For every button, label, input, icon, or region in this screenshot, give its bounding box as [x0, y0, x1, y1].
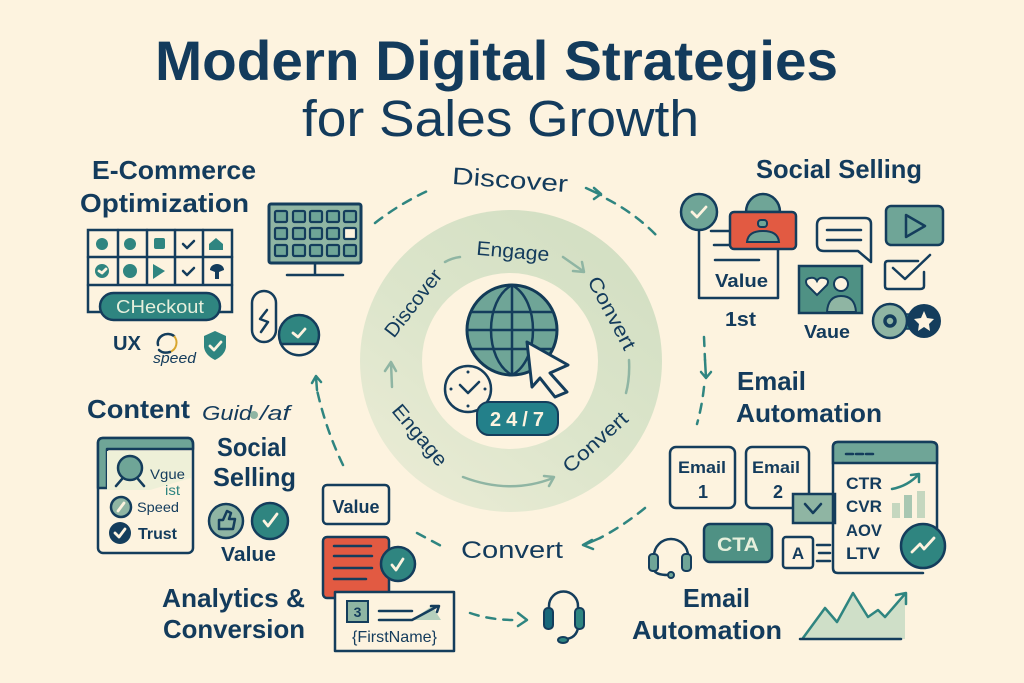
heading upper: [736, 366, 882, 428]
icon: monitor: [269, 204, 361, 275]
text format icon: A: [792, 544, 804, 563]
heading lower: Automation: [632, 615, 782, 645]
button: checkout: CHeckout: [116, 297, 204, 317]
value document: [699, 225, 778, 298]
script label: /af: [257, 403, 293, 425]
personalised email card: [335, 592, 454, 651]
outer cycle: Discover: Discover: [451, 163, 569, 198]
text format icon: [783, 537, 830, 568]
icon: headset small: [649, 539, 691, 578]
badge: 24/7: 24/7: [490, 409, 544, 431]
personalised email card: 3: [354, 604, 362, 620]
ring label: Convert lower: Convert: [559, 407, 633, 478]
heading upper: Email: [737, 366, 806, 396]
label: UX: UX: [113, 333, 142, 355]
ring label: Engage: Engage: [476, 238, 550, 266]
content card: ist: [165, 482, 180, 498]
icon: trend badge: [901, 524, 945, 568]
icon: clock: [445, 366, 491, 412]
heading: social selling: Selling: [213, 462, 296, 492]
ring label: Engage lower: Engage: [387, 400, 451, 471]
icon: check gauge: [279, 315, 319, 355]
profile card: [730, 194, 796, 249]
ring arrows: [385, 257, 629, 486]
icon: thumbs up: [209, 504, 243, 538]
metrics window: LTV: [846, 544, 881, 563]
heading: Social Selling: [756, 154, 922, 184]
metrics window: CTR: [846, 474, 882, 493]
heading: E-Commerce: [92, 155, 256, 185]
badge: 24/7: [477, 402, 558, 435]
feature grid: [88, 230, 232, 312]
script label: [202, 403, 293, 425]
icon: check circle: [381, 547, 415, 581]
ring label: Convert upper: Convert: [583, 273, 640, 354]
heading: social selling: [213, 432, 296, 492]
icon: cursor: [527, 342, 568, 397]
icon: globe: [467, 285, 557, 375]
metrics window: CVR: [846, 497, 882, 516]
button: CTA: [704, 524, 772, 562]
value box: Value: [332, 497, 380, 517]
heading: [80, 155, 256, 218]
label: 1st: 1st: [725, 309, 756, 331]
metrics window: [833, 442, 937, 573]
panel: e-commerce optimization: [80, 155, 361, 367]
heading: Analytics &: [162, 583, 305, 613]
label: value: Value: [221, 544, 276, 566]
icon: speed swirl: speed: [153, 350, 197, 367]
heading: Optimization: [80, 188, 249, 218]
button: CTA: CTA: [717, 535, 759, 556]
icon: checkbox: [885, 255, 930, 289]
panel: email automation: [632, 366, 945, 645]
email 1 box: Email: [678, 458, 726, 477]
script label: Guid: [202, 403, 253, 425]
ring label: Discover: Discover: [380, 265, 447, 342]
email 2 box: Email: [752, 458, 800, 477]
content card: Vgue: [150, 466, 185, 482]
title: Modern Digital Strategies: [155, 29, 838, 92]
value box: [323, 485, 389, 524]
icon: check circle: [681, 194, 717, 230]
email 2 box: 2: [773, 482, 783, 502]
central cycle ring: [360, 210, 662, 512]
growth chart: [800, 593, 906, 639]
icon: video: [886, 206, 943, 245]
icon: lightning pill: [252, 291, 276, 342]
icon: chat bubble: [817, 218, 871, 262]
panel: social selling: [681, 154, 943, 342]
metrics window: AOV: [846, 521, 883, 540]
value document: Value: [715, 271, 768, 291]
icon: check badge: [252, 503, 288, 539]
content card: [98, 438, 193, 553]
outer cycle arrows: [312, 188, 711, 626]
panel: analytics and conversion: [162, 485, 584, 651]
heading lower: Email: [683, 583, 750, 613]
heading: [162, 583, 305, 644]
button: checkout: [100, 293, 220, 320]
icon: photo with heart and person: [799, 266, 862, 313]
heading: social selling: Social: [217, 432, 287, 462]
heading lower: [632, 583, 782, 645]
outer cycle: Convert: Convert: [461, 537, 563, 564]
icon: shield: [204, 331, 226, 360]
email 2 box: [746, 447, 809, 508]
heading: content: Content: [87, 394, 190, 424]
icon: gear and star: [873, 304, 941, 338]
heading: Conversion: [163, 614, 305, 644]
label: vaue: Vaue: [804, 322, 850, 342]
heading upper: Automation: [736, 398, 882, 428]
email 1 box: [670, 447, 735, 508]
email 1 box: 1: [698, 482, 708, 502]
content card: Speed: [137, 499, 179, 515]
content card: Trust: [138, 526, 178, 543]
title: [155, 29, 838, 147]
dropdown: [793, 494, 835, 523]
icon: speed swirl: [153, 334, 197, 367]
panel: content: [87, 394, 296, 566]
title: for Sales Growth: [302, 90, 699, 147]
icon: headset: [544, 592, 584, 643]
red document: [323, 537, 389, 598]
personalised email card: {FirstName}: [352, 629, 438, 646]
